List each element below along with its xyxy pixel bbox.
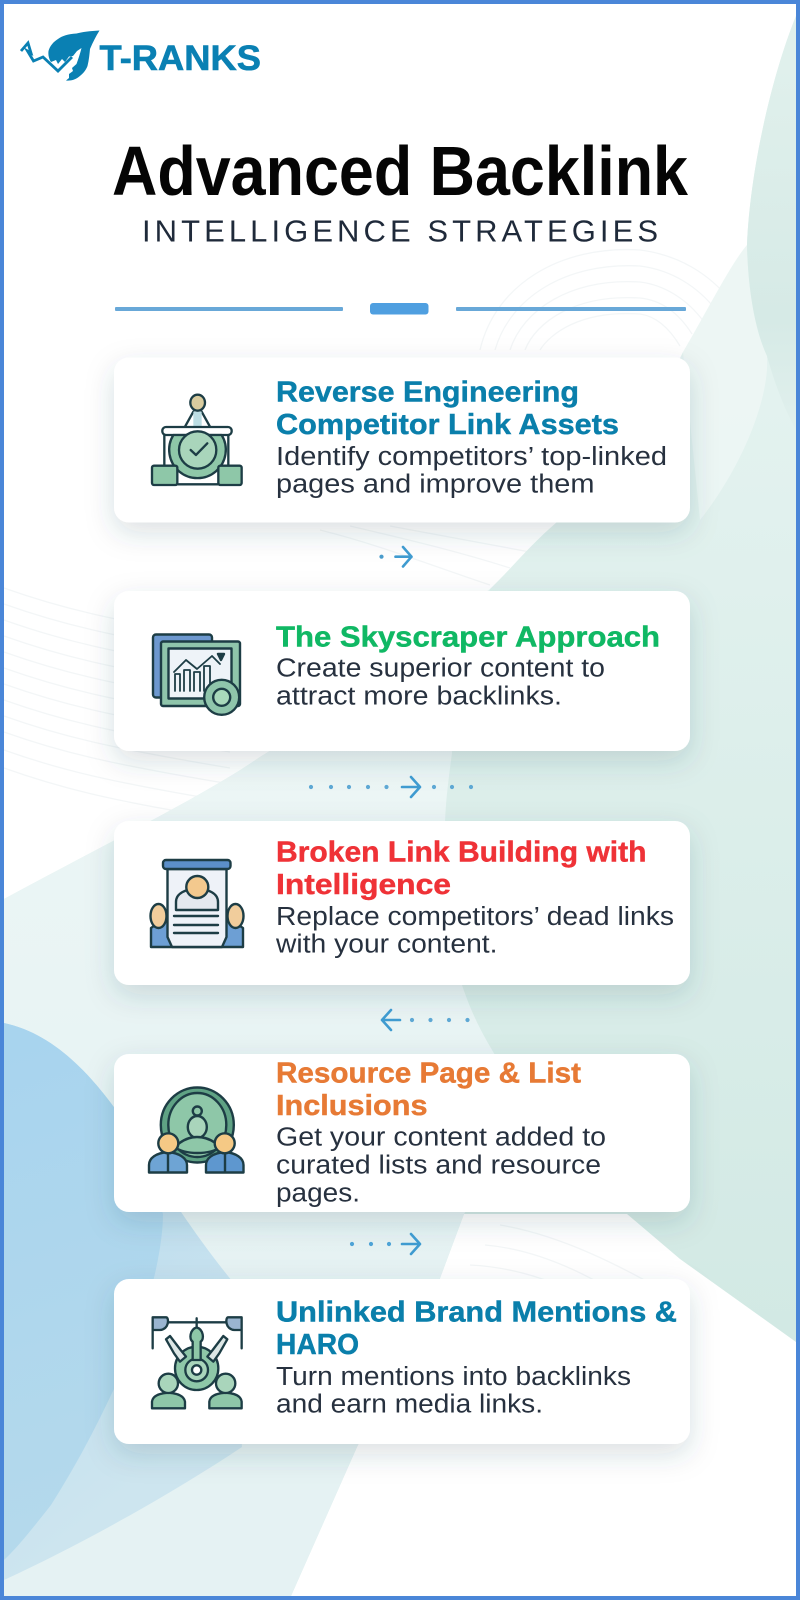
description: Identify competitors’ top-linked: [276, 443, 667, 471]
panel: Resource Page & List Inclusions: [114, 1054, 690, 1212]
panel: Broken Link Building: [114, 821, 690, 985]
heading: Broken Link Building with: [276, 836, 646, 868]
panel: The Skyscraper Approach: [114, 591, 690, 751]
arrow 1: [379, 547, 412, 566]
arrow 3: [382, 1010, 470, 1030]
heading: Reverse Engineering: [276, 376, 579, 408]
heading line 2: HARO: [276, 1329, 359, 1361]
icon: dinosaur head with rising arrow: [21, 30, 100, 81]
divider: [115, 303, 686, 314]
logo wordmark: T-RANKS: [100, 39, 261, 78]
description: Turn mentions into backlinks: [276, 1363, 631, 1391]
icon: outreach arrows and people: [152, 1317, 242, 1408]
icon: group in target circle: [149, 1088, 244, 1172]
description line 2: with your content.: [275, 931, 498, 959]
heading: Resource Page & List: [276, 1057, 582, 1089]
description line 2: attract more backlinks.: [276, 682, 562, 710]
heading line 2: Intelligence: [276, 869, 451, 901]
panel: Reverse Engineering: [114, 358, 690, 522]
arrow 2: [309, 777, 473, 797]
icon: chart dashboard with gauge: [153, 634, 240, 715]
description line 3: pages.: [276, 1180, 360, 1208]
heading: The Skyscraper Approach: [276, 622, 660, 654]
description: Replace competitors’ dead links: [276, 903, 674, 931]
description: Create superior content to: [276, 654, 605, 682]
arrow 4: [350, 1234, 420, 1254]
panel: Unlinked Brand Mentions & HARO: [114, 1279, 690, 1444]
logo: T-RANKS: [21, 30, 261, 81]
heading: Unlinked Brand Mentions &: [276, 1297, 677, 1329]
description line 2: pages and improve them: [276, 470, 594, 498]
heading line 2: Competitor Link Assets: [276, 409, 619, 441]
icon: balance with check badge: [152, 395, 242, 485]
description line 2: curated lists and resource: [276, 1151, 601, 1179]
title: Advanced Backlink: [112, 132, 688, 210]
subtitle: INTELLIGENCE STRATEGIES: [142, 214, 658, 248]
description line 2: and earn media links.: [276, 1391, 543, 1419]
icon: person holding document: [150, 860, 244, 947]
description: Get your content added to: [276, 1124, 606, 1152]
heading line 2: Inclusions: [276, 1090, 428, 1122]
